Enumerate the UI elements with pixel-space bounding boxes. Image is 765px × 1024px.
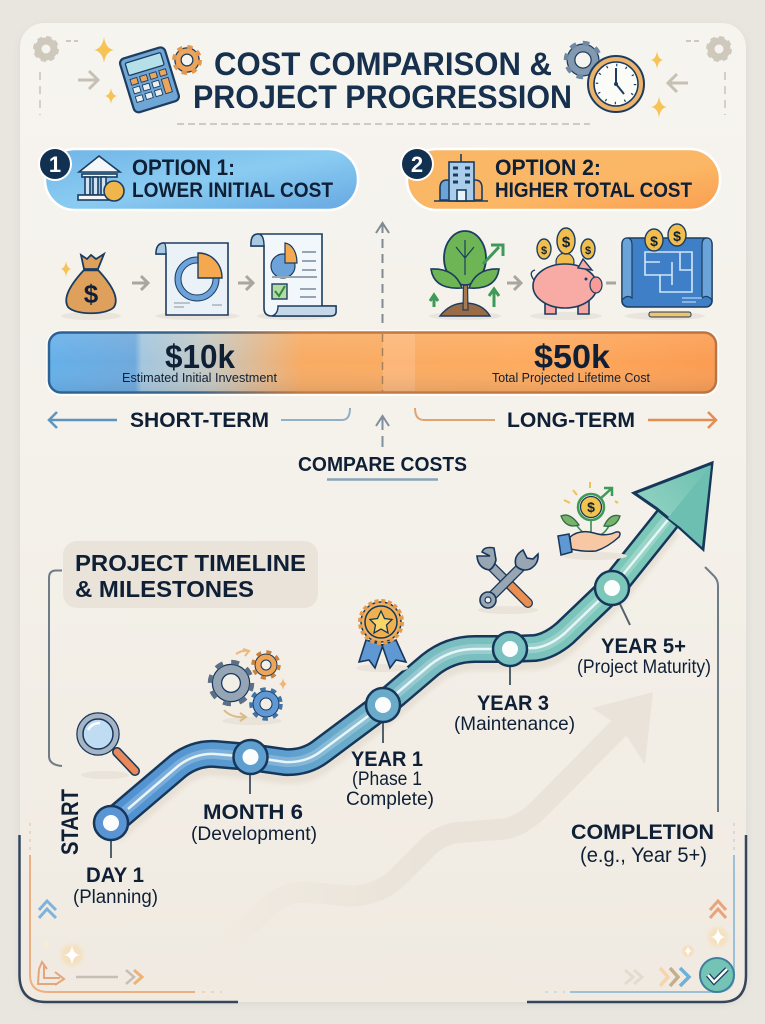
icon: corner arrow bbox=[38, 962, 64, 985]
icon: piggy bank: $ bbox=[541, 245, 547, 257]
label bbox=[73, 864, 158, 908]
icon: orange chevrons up bbox=[710, 901, 726, 918]
header decorations bbox=[35, 37, 730, 124]
badge 1 bbox=[38, 147, 72, 181]
badge 2: 2 bbox=[411, 152, 423, 177]
milestone: year 5+ bbox=[577, 571, 711, 678]
label: (Maintenance) bbox=[454, 714, 575, 735]
label: DAY 1 bbox=[86, 864, 144, 887]
long-term value bbox=[492, 338, 651, 385]
icon: medal bbox=[356, 601, 408, 672]
icon: blueprint: $ bbox=[650, 233, 658, 249]
title: COST COMPARISON & bbox=[214, 46, 552, 82]
node bbox=[94, 806, 128, 840]
icon: left glow sparkle bbox=[43, 939, 83, 966]
node bbox=[234, 740, 268, 774]
label bbox=[346, 748, 434, 810]
long-term value: $50k bbox=[534, 338, 611, 375]
timeline arrow path bbox=[111, 463, 712, 830]
timeline heading: PROJECT TIMELINE bbox=[75, 550, 306, 576]
icon: sparkle large bbox=[94, 37, 114, 63]
cost bar bbox=[46, 330, 719, 396]
compare costs label: COMPARE COSTS bbox=[298, 454, 467, 476]
label: (Project Maturity) bbox=[577, 657, 711, 678]
option 1 label: LOWER INITIAL COST bbox=[132, 179, 333, 202]
icon: clock bbox=[588, 56, 644, 112]
icon: orange gear bbox=[174, 47, 200, 73]
icon: document with ring chart bbox=[155, 243, 239, 320]
title: PROJECT PROGRESSION bbox=[193, 79, 572, 115]
node bbox=[493, 632, 527, 666]
icon: blueprint: $ bbox=[673, 228, 681, 244]
center dashed arrow bbox=[376, 223, 389, 325]
short-term label: SHORT-TERM bbox=[130, 409, 269, 432]
long-term value: Total Projected Lifetime Cost bbox=[492, 371, 651, 385]
option 2 label bbox=[495, 155, 692, 202]
timeline heading bbox=[63, 541, 318, 608]
label: (Development) bbox=[191, 824, 317, 845]
node bbox=[595, 571, 629, 605]
node bbox=[366, 688, 400, 722]
icon: gray line and chevrons bbox=[76, 970, 134, 984]
icon: gears bbox=[210, 649, 287, 725]
milestone: month 6 bbox=[191, 740, 317, 845]
milestone: year 3 bbox=[454, 632, 575, 735]
long-term label: LONG-TERM bbox=[507, 409, 635, 432]
right bracket bbox=[705, 567, 718, 812]
option 1 label bbox=[132, 155, 333, 202]
panel: option 1 pill bbox=[38, 147, 358, 210]
completion label: COMPLETION bbox=[571, 821, 714, 844]
icon: money bag bbox=[61, 254, 121, 320]
option 2 label: OPTION 2: bbox=[495, 155, 601, 180]
badge 1: 1 bbox=[49, 152, 61, 177]
icon: office building bbox=[434, 154, 488, 201]
short-term value: $10k bbox=[165, 338, 236, 375]
icon: calculator bbox=[119, 46, 180, 114]
label: Complete) bbox=[346, 789, 434, 810]
title bbox=[193, 46, 572, 115]
option 2 label: HIGHER TOTAL COST bbox=[495, 179, 692, 202]
icon: arrow bbox=[238, 276, 253, 290]
icon: money bag: $ bbox=[84, 279, 99, 309]
label: MONTH 6 bbox=[203, 801, 303, 824]
icon: arrow bbox=[507, 276, 521, 290]
icon: blue chevrons bbox=[39, 901, 56, 918]
option 1 label: OPTION 1: bbox=[132, 155, 235, 180]
label bbox=[191, 801, 317, 845]
short-term value: Estimated Initial Investment bbox=[122, 371, 278, 385]
short-term scale bbox=[49, 408, 350, 432]
label: YEAR 5+ bbox=[601, 635, 686, 658]
timeline heading: & MILESTONES bbox=[75, 576, 254, 602]
icon: pale chevrons bbox=[625, 970, 642, 984]
icon: dash bbox=[606, 282, 616, 284]
badge 2 bbox=[400, 147, 434, 181]
arrow head bbox=[634, 463, 712, 549]
icon: blue gear bbox=[566, 43, 600, 77]
icon: growing tree bbox=[429, 231, 503, 320]
left bracket bbox=[49, 570, 62, 766]
label: YEAR 3 bbox=[477, 692, 549, 715]
label: (Planning) bbox=[73, 887, 158, 908]
label bbox=[454, 692, 575, 735]
icon: multi-color chevrons bbox=[670, 968, 689, 986]
icon: blueprint bbox=[622, 224, 712, 320]
icon: magnifier bbox=[77, 713, 135, 779]
icon: left arrow bbox=[78, 71, 98, 89]
label bbox=[577, 635, 711, 678]
label: (Phase 1 bbox=[352, 769, 422, 790]
compare arrow bbox=[376, 416, 389, 447]
icon: sparkle right top bbox=[651, 51, 663, 69]
icon: color chevrons bbox=[660, 968, 668, 986]
icon: arrow bbox=[132, 276, 148, 290]
icon: piggy bank bbox=[530, 228, 602, 320]
icon: money plant in hand: $ bbox=[587, 499, 595, 515]
completion label bbox=[571, 821, 714, 867]
icon: top-right gear bbox=[708, 38, 730, 60]
panel: option 2 pill bbox=[400, 147, 720, 210]
completion label: (e.g., Year 5+) bbox=[580, 844, 707, 867]
start label: START bbox=[57, 789, 84, 855]
icon: piggy bank: $ bbox=[585, 245, 591, 257]
icon: sparkle right bottom bbox=[651, 96, 667, 118]
icon: sparkle small bbox=[105, 88, 117, 104]
icon: bank bbox=[78, 156, 124, 201]
milestone: day 1 bbox=[73, 806, 158, 908]
icon: top-left gear bbox=[35, 38, 57, 60]
bottom-right corner frame bbox=[527, 823, 746, 1002]
label: YEAR 1 bbox=[351, 748, 423, 771]
icon: right glow sparkles bbox=[682, 927, 728, 957]
icon: wrench and screwdriver bbox=[477, 548, 538, 614]
long-term scale bbox=[415, 408, 716, 432]
bottom-left corner frame bbox=[20, 823, 238, 1002]
short-term value bbox=[122, 338, 278, 385]
icon: orange chevron bbox=[134, 970, 142, 984]
milestone: year 1 bbox=[346, 688, 434, 810]
icon: completion check badge bbox=[700, 958, 734, 992]
icon: right arrow bbox=[668, 74, 688, 92]
icon: piggy bank: $ bbox=[562, 234, 571, 251]
icon: report document bbox=[251, 234, 336, 320]
icon: money plant in hand bbox=[558, 482, 627, 560]
background ghost arrow bbox=[205, 692, 653, 965]
